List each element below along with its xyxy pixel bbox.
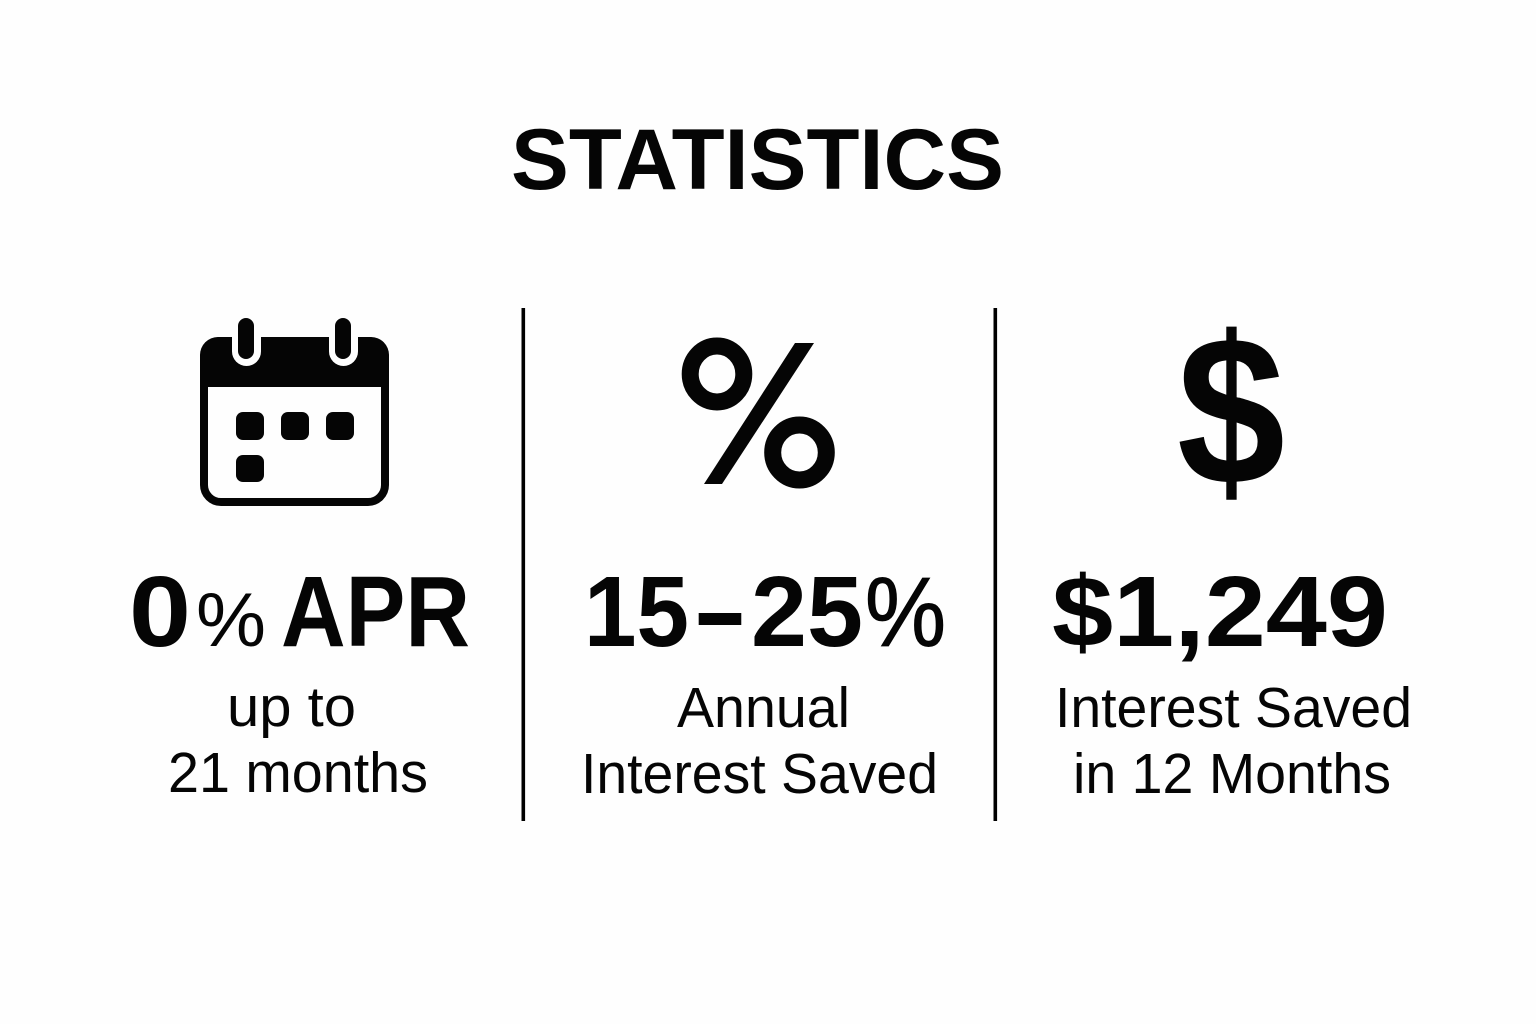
caption: up to 21 months: up to <box>227 675 356 739</box>
statistic: 15–25%: % <box>865 557 946 667</box>
caption: Interest Saved in 12 Months <box>1055 676 1412 806</box>
statistic: 15–25%: – <box>697 556 743 668</box>
caption: up to 21 months: 21 months <box>168 741 428 805</box>
icon: percent sign <box>690 343 826 484</box>
caption: up to 21 months <box>168 675 428 805</box>
statistic: 0% APR <box>129 556 470 668</box>
statistic: 15–25% <box>584 556 946 668</box>
caption: Annual Interest Saved: Annual <box>677 676 850 740</box>
title: STATISTICS <box>511 112 1004 208</box>
statistic: 15–25%: 25 <box>751 556 863 668</box>
statistic: 0% APR: 0 <box>129 556 191 668</box>
caption: Annual Interest Saved: Interest Saved <box>581 742 938 806</box>
caption: Interest Saved in 12 Months: in 12 Months <box>1073 742 1391 806</box>
statistic: 0% APR: APR <box>281 556 470 668</box>
icon: calendar <box>200 310 389 502</box>
statistic: $1,249: $1,249 <box>1052 556 1388 668</box>
panel: $1,249 <box>1052 292 1412 806</box>
icon: dollar sign: $ <box>1177 292 1285 529</box>
panel: 0% APR <box>129 310 470 805</box>
caption: Annual Interest Saved <box>581 676 938 806</box>
caption: Interest Saved in 12 Months: Interest Saved <box>1055 676 1412 740</box>
panel: 15–25% <box>581 343 946 806</box>
statistic: 15–25%: 15 <box>584 556 689 668</box>
statistic: 0% APR: % <box>196 578 266 663</box>
